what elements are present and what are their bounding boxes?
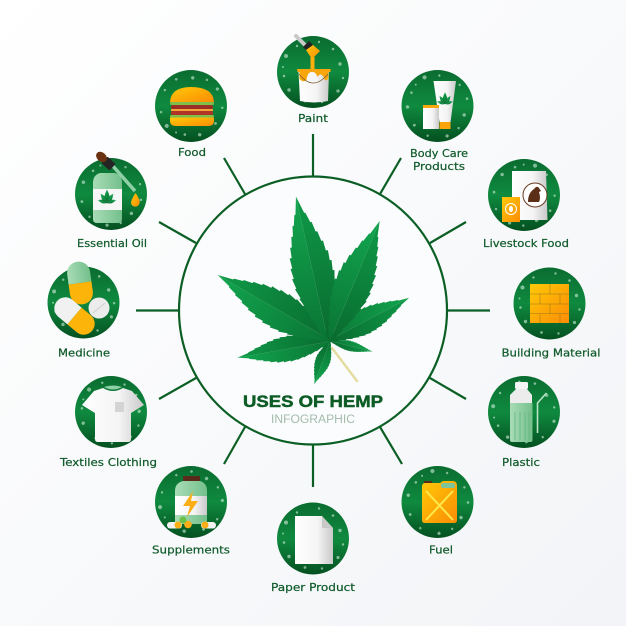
label: Body Care Products: Body Care (410, 147, 468, 160)
label: Livestock Food: Livestock Food (483, 237, 569, 250)
label: Medicine: Medicine (58, 346, 110, 360)
item: textiles clothing (73, 374, 149, 450)
item: fuel (394, 458, 481, 546)
label: Paint: Paint (298, 112, 329, 125)
label: Building Material: Building Material (502, 346, 600, 360)
icon: feed bags (502, 171, 548, 222)
icon: jerry can (422, 481, 457, 523)
label: Paper Product: Paper Product (271, 581, 356, 594)
label: Textiles Clothing: Textiles Clothing (59, 456, 157, 469)
title: USES OF HEMP (243, 392, 383, 411)
icon: brick wall (530, 284, 569, 323)
icon: supplement bottle (167, 476, 216, 528)
item: supplements (147, 458, 235, 546)
item: medicine (48, 260, 120, 339)
label: Food: Food (178, 146, 206, 159)
icon: paper sheet (295, 516, 333, 564)
item: essential oil (68, 150, 154, 237)
icon: t-shirt (82, 386, 144, 442)
icon: tube and jar (423, 81, 456, 129)
icon: capsules and pill (50, 260, 110, 339)
icon: paint bucket and brush (296, 36, 330, 102)
item: body care (394, 63, 481, 149)
label: Fuel: Fuel (429, 544, 453, 556)
item: livestock food (488, 159, 560, 231)
subtitle: INFOGRAPHIC (271, 414, 355, 426)
label: Supplements: Supplements (152, 544, 230, 556)
hemp leaf illustration (208, 192, 415, 387)
item: building material (514, 268, 586, 340)
label: Plastic: Plastic (502, 456, 540, 469)
item: plastic (484, 372, 564, 452)
item: food (151, 66, 231, 146)
item: paint (277, 36, 349, 108)
label: Essential Oil: Essential Oil (77, 237, 147, 250)
item: paper product (277, 502, 349, 574)
connector lines (136, 134, 490, 487)
icon: burger (170, 87, 214, 126)
central ring (179, 176, 447, 444)
label: Body Care Products: Products (413, 160, 465, 173)
icon: oil bottle with dropper (93, 150, 140, 223)
icon: bottle and straw (510, 382, 546, 442)
